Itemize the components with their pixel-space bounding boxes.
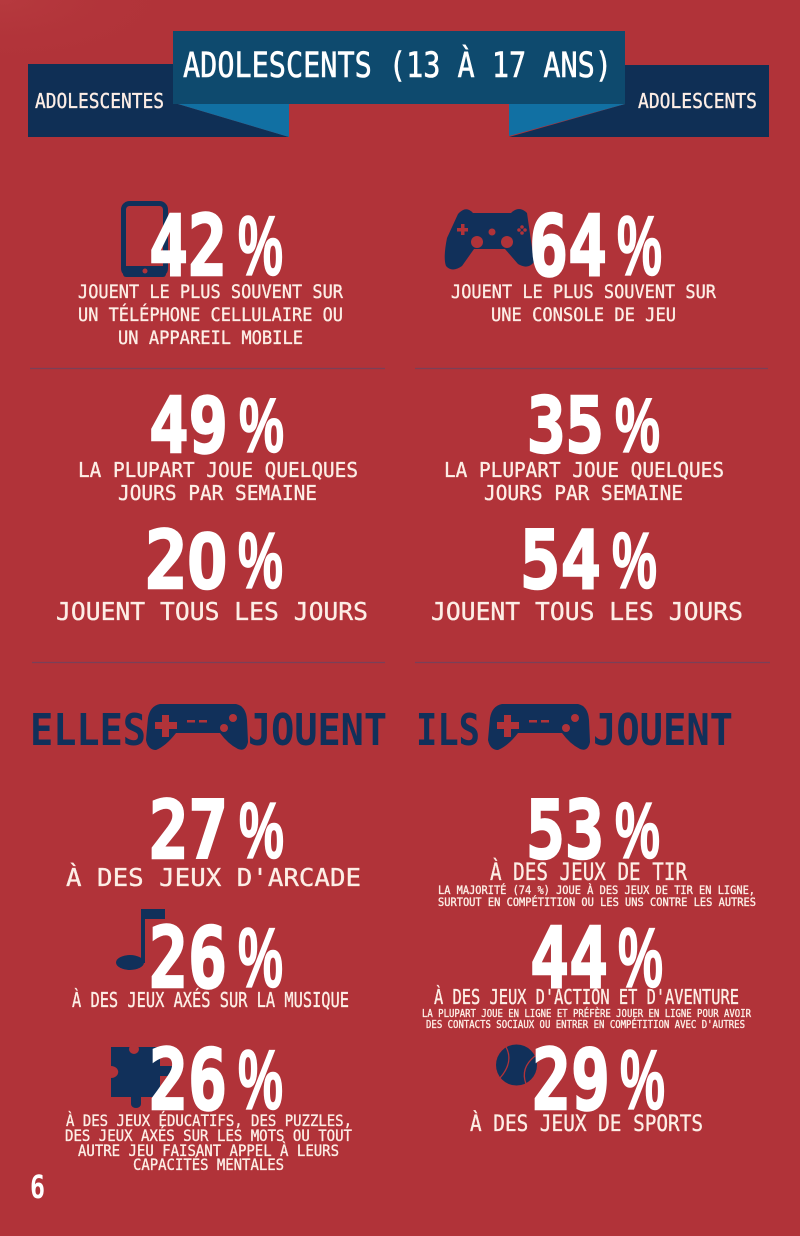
heading: ils jouent: JOUENT <box>593 705 733 756</box>
stat: 54% every day: 54 <box>520 514 601 607</box>
stat: 54% every day: JOUENT TOUS LES JOURS <box>431 597 743 626</box>
stat: 64% console: UNE CONSOLE DE JEU <box>491 304 676 326</box>
heading: elles jouent: JOUENT <box>248 705 387 756</box>
stat: 42% mobile <box>78 197 343 349</box>
stat: 26% puzzles: AUTRE JEU FAISANT APPEL À LEURS <box>78 1141 339 1160</box>
heading: ils jouent: ILS <box>416 705 480 756</box>
stat: 44% action: % <box>618 911 663 1005</box>
stat: 44% action: DES CONTACTS SOCIAUX OU ENTRER EN COMPÉTITION AVEC D'AUTRES <box>426 1018 745 1031</box>
stat: 42% mobile: UN TÉLÉPHONE CELLULAIRE OU <box>78 303 343 326</box>
stat: 44% action: 44 <box>530 909 608 1007</box>
stat: 64% console <box>445 197 716 326</box>
stat: 53% shooter: LA MAJORITÉ (74 %) JOUE À DES JEUX DE TIR EN LIGNE, <box>438 882 755 897</box>
stat: 53% shooter <box>438 784 756 909</box>
heading: ils jouent <box>416 704 733 756</box>
stat: 27% arcade <box>66 784 361 892</box>
stat: 29% sports <box>470 1031 703 1137</box>
stat: 49% few days <box>78 382 358 505</box>
icon: music note <box>116 909 165 970</box>
stat: 20% every day: 20 <box>145 514 227 607</box>
stat: 26% puzzles: % <box>238 1033 283 1127</box>
heading: elles jouent: ELLES <box>30 705 146 756</box>
icon: puzzle piece <box>111 1044 172 1108</box>
stat: 27% arcade: % <box>239 786 284 875</box>
stat: 53% shooter: 53 <box>526 784 604 877</box>
label: adolescents: ADOLESCENTS <box>638 89 757 113</box>
stat: 44% action: LA PLUPART JOUE EN LIGNE ET PRÉFÈRE JOUER EN LIGNE POUR AVOIR <box>422 1007 752 1020</box>
central ribbon <box>173 31 625 104</box>
stat: 54% every day: % <box>612 516 657 605</box>
stat: 26% music: 26 <box>149 909 227 1007</box>
stat: 29% sports: % <box>620 1033 665 1127</box>
stat: 27% arcade: À DES JEUX D'ARCADE <box>66 863 361 892</box>
stat: 49% few days: LA PLUPART JOUE QUELQUES <box>78 458 358 482</box>
stat: 53% shooter: % <box>615 786 660 875</box>
stat: 64% console: % <box>617 199 662 293</box>
page number: 6 <box>30 1168 45 1206</box>
stat: 54% every day <box>431 514 743 626</box>
stat: 26% puzzles: 26 <box>149 1031 227 1129</box>
stat: 20% every day <box>56 514 368 626</box>
stat: 20% every day: JOUENT TOUS LES JOURS <box>56 597 368 626</box>
stat: 26% music: À DES JEUX AXÉS SUR LA MUSIQUE <box>72 988 349 1012</box>
stat: 44% action <box>422 909 752 1031</box>
icon: gamepad <box>146 704 248 750</box>
stat: 42% mobile: % <box>238 199 283 293</box>
icon: tablet phone <box>123 204 166 277</box>
stat: 53% shooter: SURTOUT EN COMPÉTITION OU LES UNS CONTRE LES AUTRES <box>438 894 756 909</box>
stat: 35% few days: 35 <box>527 382 604 471</box>
stat: 49% few days: 49 <box>149 382 228 471</box>
stat: 29% sports: À DES JEUX DE SPORTS <box>470 1111 703 1137</box>
stat: 26% music <box>72 909 349 1012</box>
stat: 42% mobile: JOUENT LE PLUS SOUVENT SUR <box>78 281 343 303</box>
stat: 35% few days: LA PLUPART JOUE QUELQUES <box>444 458 724 482</box>
icon: console controller <box>445 209 534 270</box>
stat: 64% console: 64 <box>529 197 607 295</box>
icon: ball <box>496 1044 537 1086</box>
stat: 42% mobile: UN APPAREIL MOBILE <box>118 327 303 349</box>
stat: 49% few days: JOURS PAR SEMAINE <box>118 481 317 505</box>
heading: elles jouent <box>30 704 387 756</box>
stat: 49% few days: % <box>239 383 284 469</box>
stat: 26% music: % <box>238 911 283 1005</box>
header banner <box>28 31 769 137</box>
right ribbon: adolescents <box>509 65 769 137</box>
stat: 26% puzzles: À DES JEUX ÉDUCATIFS, DES PUZZLES, <box>66 1111 352 1130</box>
stat: 26% puzzles: CAPACITÉS MENTALES <box>133 1155 284 1174</box>
stat: 29% sports: 29 <box>532 1031 610 1129</box>
stat: 35% few days: JOURS PAR SEMAINE <box>484 481 683 505</box>
left ribbon: adolescentes <box>28 64 289 137</box>
icon: gamepad <box>488 704 590 750</box>
stat: 35% few days: % <box>615 383 660 469</box>
stat: 20% every day: % <box>238 516 283 605</box>
title: ADOLESCENTS (13 À 17 ANS) <box>183 44 612 86</box>
stat: 35% few days <box>444 382 724 505</box>
stat: 64% console: JOUENT LE PLUS SOUVENT SUR <box>451 281 716 303</box>
stat: 26% puzzles: DES JEUX AXÉS SUR LES MOTS OU TOUT <box>65 1126 352 1145</box>
label: adolescentes: ADOLESCENTES <box>35 89 164 113</box>
stat: 27% arcade: 27 <box>149 784 228 877</box>
stat: 53% shooter: À DES JEUX DE TIR <box>490 857 687 886</box>
stat: 26% puzzles <box>65 1031 352 1174</box>
stat: 42% mobile: 42 <box>149 197 227 295</box>
